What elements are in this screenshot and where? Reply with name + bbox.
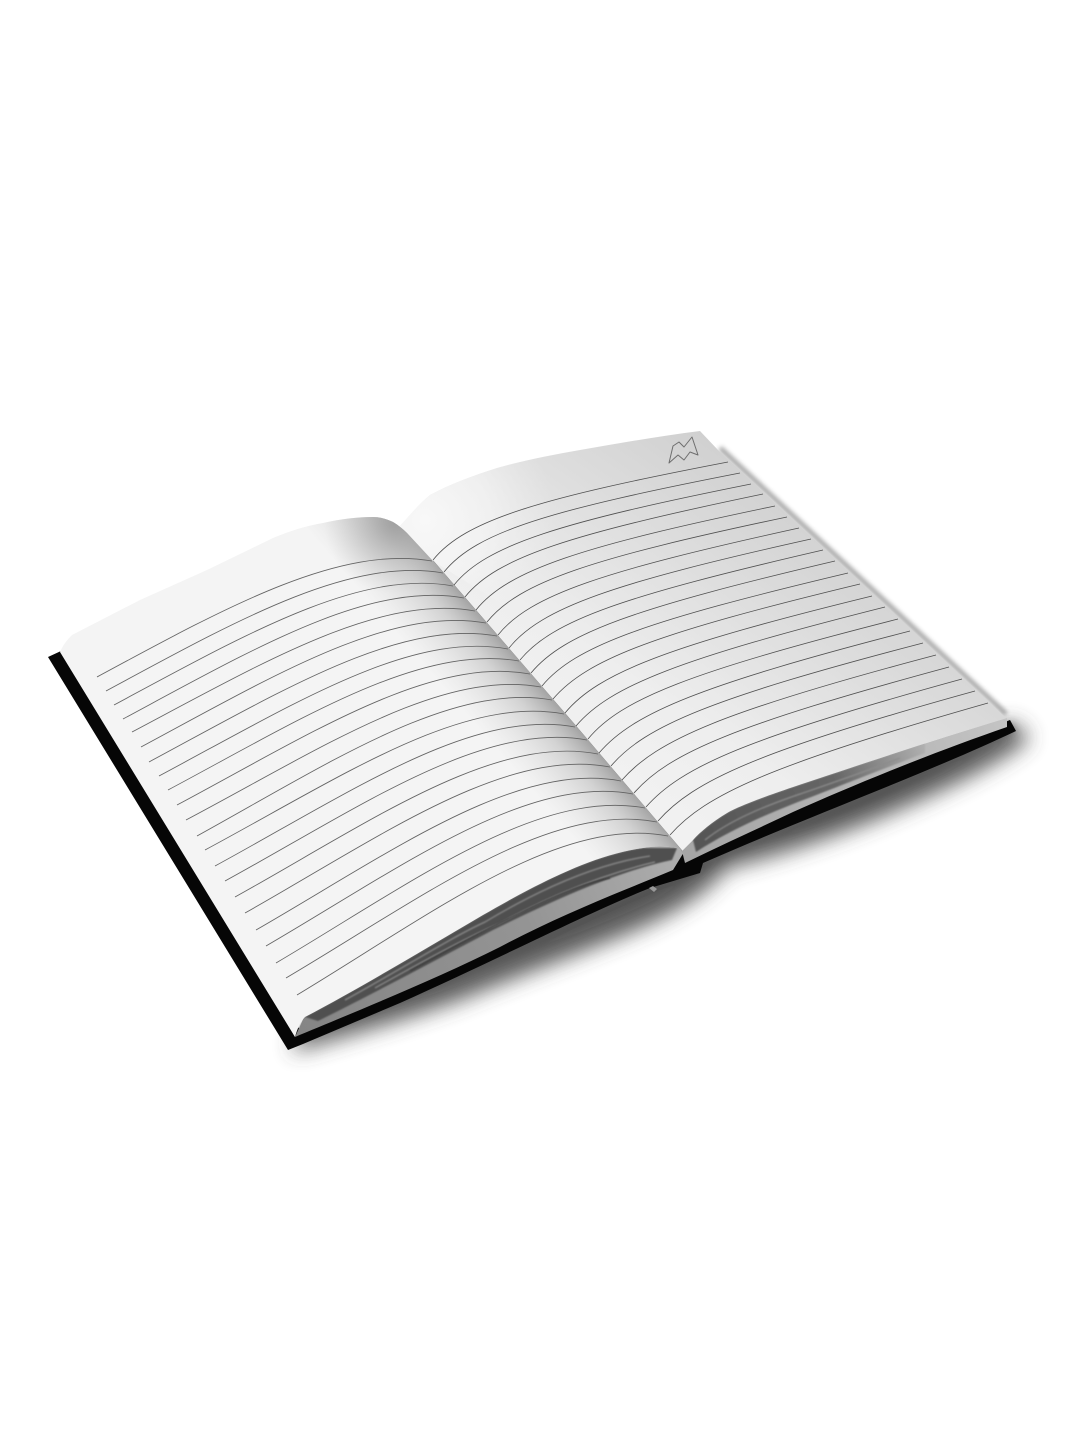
illustration: open lined notebook <box>48 431 1040 1064</box>
black hardcover <box>48 651 1016 1050</box>
cast shadow beneath notebook <box>292 722 1030 1052</box>
ruled lines: right page <box>433 462 988 835</box>
right page <box>400 431 1007 851</box>
small spine tab <box>649 886 657 892</box>
left page <box>60 517 682 1037</box>
dark page edges band <box>693 743 925 852</box>
icon: mountain logo <box>669 437 698 463</box>
page block: right stack <box>682 718 1007 863</box>
page block: left stack <box>295 846 684 1037</box>
right edge page shadow <box>720 448 1006 714</box>
dark page edges band <box>305 848 677 1021</box>
ruled lines: left page <box>97 558 668 995</box>
